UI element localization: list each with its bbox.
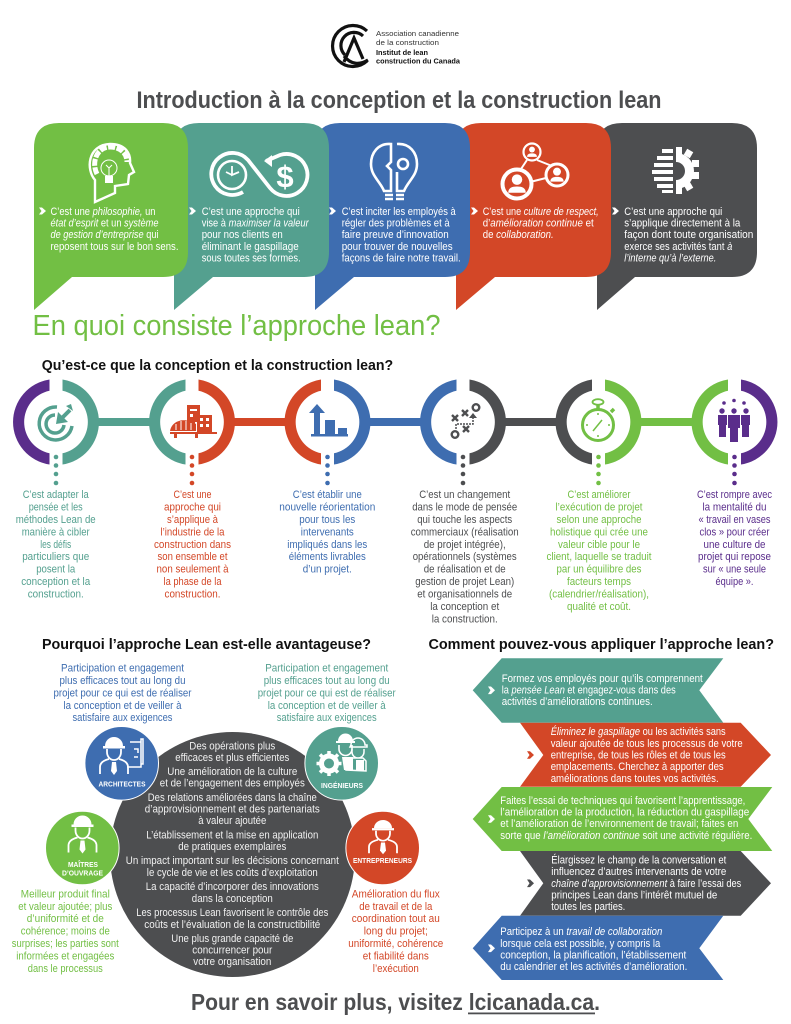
text: qui touche les aspects <box>417 514 513 526</box>
text: d’un projet. <box>303 564 352 576</box>
label: ARCHITECTES <box>98 780 146 789</box>
panel: speech bubble teal <box>174 123 329 310</box>
text: construction. <box>164 589 220 601</box>
text: architects benefit <box>54 662 192 724</box>
chevron <box>488 944 495 952</box>
benefits list: L’établissement et la mise en application <box>146 830 318 842</box>
text: C’est améliorer <box>568 489 631 501</box>
text block: sous toutes ses formes. <box>202 252 301 264</box>
text: contractors benefit <box>348 888 443 975</box>
benefits list: concurrencer pour <box>192 944 273 956</box>
panel: speech bubble red <box>456 123 611 310</box>
text: s’applique à <box>167 514 218 526</box>
text block: façons de faire notre travail. <box>342 252 461 264</box>
text: Formez vos employés pour qu’ils comprennent <box>502 673 703 685</box>
text: contractors benefit: l’exécution <box>373 963 419 975</box>
ribbon 2: red <box>520 723 771 787</box>
text: éléments livrables <box>289 551 366 563</box>
text: opérationnels (systèmes <box>413 551 517 563</box>
text: owners benefit <box>12 888 119 975</box>
text block: de gestion d’entreprise qui <box>50 229 159 241</box>
text: gestion de projet Lean) <box>415 576 514 588</box>
text <box>500 926 687 973</box>
ring <box>420 380 506 464</box>
text: de projet intégrée), <box>424 539 506 551</box>
benefits list: Des opérations plus <box>189 740 276 752</box>
text: engineers benefit: projet pour ce qui est de réaliser <box>258 688 396 700</box>
text <box>500 795 752 842</box>
text: équipe ». <box>716 576 754 588</box>
chevron <box>39 208 46 214</box>
benefits list: Les processus Lean favorisent le contrôle des <box>136 907 329 919</box>
panel: speech bubble gray <box>597 123 757 310</box>
ring <box>285 380 370 464</box>
icon: architect with blueprint <box>100 737 143 775</box>
text: activités d’améliorations continues. <box>502 696 653 708</box>
text block: d’amélioration continue et <box>483 218 594 230</box>
dots <box>732 455 737 485</box>
text block: pour trouver de nouvelles <box>342 241 453 253</box>
text: owners benefit: d’uniformité et de <box>27 913 104 925</box>
panel: speech bubble blue <box>315 123 470 310</box>
text: selon une approche <box>556 514 642 526</box>
text: valeur ajoutée de tous les processus de votre <box>551 738 743 750</box>
benefits list: Des relations améliorées dans la chaîne <box>148 792 317 804</box>
icon: bars with up arrow <box>309 404 348 436</box>
step 6: team <box>692 380 777 588</box>
logo text: Institut de lean <box>376 48 428 57</box>
text: C’est établir une <box>293 489 362 501</box>
benefits list: Une plus grande capacité de <box>171 933 293 945</box>
text: contractors benefit: Amélioration du flux <box>352 888 440 900</box>
text: projet qui repose <box>698 551 771 563</box>
text: holistique qui crée une <box>550 526 648 538</box>
benefits list: efficaces et plus efficientes <box>175 752 290 764</box>
text: impliqués dans les <box>287 539 368 551</box>
benefits list: d’approvisionnement et des partenariats <box>145 804 320 816</box>
text: les défis <box>40 539 72 551</box>
step 4: playbook <box>411 380 519 626</box>
heading: timeline section: Qu’est-ce que la conception et la construction lean? <box>42 358 393 374</box>
benefits list: de pratiques exemplaires <box>178 841 287 853</box>
benefits list: coûts et l’évaluation de la constructibilité <box>144 919 320 931</box>
text: emplacements. Cherchez à apporter des <box>551 761 724 773</box>
text block <box>342 206 461 264</box>
text: et organisationnels de <box>417 589 512 601</box>
logo <box>333 25 461 66</box>
text: lorsque cela est possible, y compris la <box>500 938 660 950</box>
text: C’est une <box>174 489 212 501</box>
step 5: stopwatch <box>546 380 652 613</box>
text: chaîne d’approvisionnement à faire l’essai des <box>551 878 742 890</box>
text block: façon dont toute organisation <box>624 229 753 241</box>
text: C’est adapter la <box>23 489 89 501</box>
text: engineers benefit <box>258 662 396 724</box>
benefits list: votre organisation <box>193 956 271 968</box>
text: particuliers que <box>22 551 89 563</box>
text: nouvelle réorientation <box>279 501 375 513</box>
text: la construction. <box>432 614 498 626</box>
icon: owner worker <box>68 816 96 854</box>
text block: s’applique directement à la <box>624 218 740 230</box>
text: qualité et coût. <box>567 601 631 613</box>
step 3: chart <box>279 380 375 576</box>
badge: architectes <box>85 726 158 800</box>
text block <box>483 206 599 241</box>
icon: stopwatch <box>582 399 614 440</box>
badge: entrepreneurs <box>346 811 420 885</box>
panel: speech bubble green <box>34 123 188 310</box>
text: construction. <box>28 589 84 601</box>
text <box>502 673 703 708</box>
text: client, laquelle se traduit <box>546 551 652 563</box>
text block <box>624 206 753 264</box>
ring <box>556 380 641 464</box>
text: architects benefit: plus efficaces tout au long du <box>60 675 186 687</box>
text block: éliminant le gaspillage <box>202 241 299 253</box>
icon: gear with lines <box>652 147 699 194</box>
text: la phase de la <box>164 576 222 588</box>
dots <box>461 455 465 485</box>
text: architects benefit: Participation et engagement <box>61 662 184 674</box>
dots <box>190 455 194 485</box>
icon: strategy play <box>452 404 479 438</box>
label: MAÎTRES <box>68 860 98 869</box>
benefits list: Une amélioration de la culture <box>167 766 297 778</box>
text: améliorations dans toutes vos activités. <box>551 773 719 785</box>
chevron <box>189 208 196 214</box>
text: pensée et les <box>29 501 83 513</box>
text <box>411 489 519 626</box>
text: construction dans <box>154 539 232 551</box>
text: owners benefit: surprises; les parties sont <box>12 938 119 950</box>
text: pour tous les <box>299 514 356 526</box>
text: contractors benefit: coordination tout au <box>352 913 440 925</box>
ring <box>692 380 777 464</box>
text: owners benefit: informées et engagées <box>16 950 115 962</box>
benefits list: et de l’engagement des employés <box>160 778 305 790</box>
icon: group of people <box>718 399 750 442</box>
dots <box>596 455 601 485</box>
text: l’amélioration de la production, la réduction du gaspillage <box>500 806 749 818</box>
text: contractors benefit: long du projet; <box>364 926 428 938</box>
icon: engineers and gear <box>316 734 367 776</box>
text: architects benefit: projet pour ce qui est de réaliser <box>54 688 192 700</box>
text: une culture de <box>704 539 766 551</box>
text: méthodes Lean de <box>16 514 96 526</box>
text: Élargissez le champ de la conversation et <box>551 854 726 866</box>
text: par un équilibre des <box>556 564 642 576</box>
text <box>697 489 773 588</box>
label: INGÉNIEURS <box>321 781 363 790</box>
text: contractors benefit: et fiabilité dans <box>363 950 429 962</box>
text: principes Lean dans l’intérêt mutuel de <box>551 890 717 902</box>
text: commerciaux (réalisation <box>411 526 519 538</box>
benefits list <box>126 740 339 968</box>
text <box>154 489 232 601</box>
text: C’est rompre avec <box>697 489 773 501</box>
text: « travail en vases <box>698 514 771 526</box>
benefits list: Un impact important sur les décisions concernant <box>126 855 339 867</box>
text: owners benefit: dans le processus <box>28 963 103 975</box>
text: architects benefit: satisfaire aux exigences <box>72 712 173 724</box>
text block: faire preuve d’innovation <box>342 229 449 241</box>
text: et l’amélioration de l’environnement de travail; faites en <box>500 818 738 830</box>
chevron <box>527 751 534 759</box>
text: owners benefit: et valeur ajoutée; plus <box>18 901 113 913</box>
chevron <box>471 208 478 214</box>
logo text: Association canadienne <box>376 29 459 38</box>
text: engineers benefit: plus efficaces tout au long du <box>264 675 390 687</box>
heading: comment: Comment pouvez-vous appliquer l’approche lean? <box>428 637 774 653</box>
text: manière à cibler <box>22 526 90 538</box>
text: facteurs temps <box>567 576 632 588</box>
text: engineers benefit: la conception et de veiller à <box>268 700 386 712</box>
text: posent la <box>36 564 75 576</box>
text <box>279 489 375 576</box>
text: sorte que l’amélioration continue soit une activité régulière. <box>500 830 752 842</box>
benefits list: La capacité d’incorporer des innovations <box>146 881 319 893</box>
text: la pensée Lean et engagez-vous dans des <box>502 684 676 696</box>
chevron <box>488 815 495 823</box>
text: la conception et <box>430 601 499 613</box>
text: influencez d’autres intervenants de votre <box>551 866 726 878</box>
text: Éliminez le gaspillage ou les activités sans <box>551 725 726 738</box>
text: conception, la planification, l’établissement <box>500 950 686 962</box>
text: Faites l’essai de techniques qui favorisent l’apprentissage, <box>500 795 745 807</box>
label <box>62 860 103 878</box>
text <box>551 725 743 785</box>
ribbon 5: blue <box>473 916 723 980</box>
text: clos » pour créer <box>700 526 770 538</box>
logo text <box>376 29 461 66</box>
text: non seulement à <box>156 564 228 576</box>
icon: buildings and bridge <box>170 405 217 438</box>
text: contractors benefit: de travail et de la <box>359 901 432 913</box>
ribbon 3: green <box>473 787 772 851</box>
text block: reposent tous sur le bon sens. <box>50 241 178 253</box>
badge: maitres d'ouvrage <box>46 811 119 885</box>
text block <box>50 206 178 253</box>
text: engineers benefit: Participation et engagement <box>265 662 388 674</box>
text: Participez à un travail de collaboration <box>500 926 662 938</box>
badge: ingenieurs <box>305 726 379 800</box>
benefits list: dans la conception <box>192 893 273 905</box>
chevron <box>527 880 534 887</box>
step 1: target <box>13 380 99 601</box>
text block: vise à maximiser la valeur <box>202 218 309 230</box>
text: contractors benefit: uniformité, cohérence <box>348 938 443 950</box>
icon: target with arrow <box>39 404 73 440</box>
dots <box>54 455 58 485</box>
text <box>16 489 96 601</box>
timeline connectors <box>98 418 693 426</box>
icon: network of people <box>502 144 568 198</box>
text block: C’est une philosophie, un <box>50 206 156 218</box>
text block: de collaboration. <box>483 229 554 241</box>
chevron <box>488 686 495 694</box>
text block <box>202 206 309 264</box>
text: entreprise, de tous les rôles et de tous les <box>551 750 726 762</box>
ring <box>13 380 99 464</box>
text block: C’est inciter les employés à <box>342 206 456 218</box>
icon: infinity with clock and dollar <box>211 153 307 196</box>
ring <box>149 380 235 464</box>
text: l’industrie de la <box>160 526 224 538</box>
text: du calendrier et les activités d’amélioration. <box>500 961 687 973</box>
text: la mentalité du <box>702 501 766 513</box>
icon: head with light bulb <box>90 144 134 202</box>
text block: pour nos clients en <box>202 229 283 241</box>
panel: central benefits circle <box>110 732 355 977</box>
text block: régler des problèmes et à <box>342 218 450 230</box>
text: C’est un changement <box>419 489 510 501</box>
text: (calendrier/réalisation), <box>549 589 649 601</box>
text block: C’est une approche qui <box>624 206 722 218</box>
logo text: construction du Canada <box>376 56 461 66</box>
footer call to action: Pour en savoir plus, visitez lcicanada.ca. <box>191 989 600 1015</box>
text block: état d’esprit et un système <box>50 218 158 230</box>
logo mark <box>333 25 368 66</box>
label: ENTREPRENEURS <box>353 856 412 865</box>
heading: en quoi consiste: En quoi consiste l’approche lean? <box>32 310 440 342</box>
text block: exerce ses activités tant à <box>624 241 732 253</box>
text block: C’est une approche qui <box>202 206 300 218</box>
label: D’OUVRAGE <box>62 868 103 878</box>
text block: C’est une culture de respect, <box>483 206 599 218</box>
text: owners benefit: Meilleur produit final <box>21 888 110 900</box>
heading: pourquoi: Pourquoi l’approche Lean est-elle avantageuse? <box>42 637 371 653</box>
text: sur « une seule <box>703 564 766 576</box>
text: dans le mode de pensée <box>412 501 517 513</box>
text: son ensemble et <box>158 551 228 563</box>
icon: contractor worker <box>369 820 397 854</box>
text: owners benefit: cohérence; moins de <box>21 926 110 938</box>
benefits list: le cycle de vie et les coûts d’exploitation <box>147 867 318 879</box>
text: approche qui <box>164 501 221 513</box>
text: de réalisation et de <box>424 564 506 576</box>
text block: l’interne qu’à l’externe. <box>624 252 716 264</box>
icon: split light bulb <box>371 144 417 199</box>
ribbon 1: teal <box>473 658 723 723</box>
icon: infinity with clock and dollar: $ <box>276 159 294 194</box>
text <box>551 854 742 913</box>
logo text: de la construction <box>376 38 439 47</box>
chevron <box>612 208 619 214</box>
chevron <box>329 208 336 214</box>
text: engineers benefit: satisfaire aux exigences <box>277 712 377 724</box>
text: conception et la <box>21 576 90 588</box>
step 2: buildings <box>149 380 235 601</box>
benefits list: à valeur ajoutée <box>198 815 266 827</box>
text <box>546 489 652 613</box>
ribbon 4: gray <box>520 851 771 916</box>
title: Introduction à la conception et la construction lean <box>136 87 662 114</box>
text: toutes les parties. <box>551 901 625 913</box>
text: l’exécution de projet <box>556 501 642 513</box>
dots <box>325 455 330 485</box>
text: architects benefit: la conception et de veiller à <box>64 700 182 712</box>
text: valeur cible pour le <box>558 539 640 551</box>
text: intervenants <box>301 526 354 538</box>
